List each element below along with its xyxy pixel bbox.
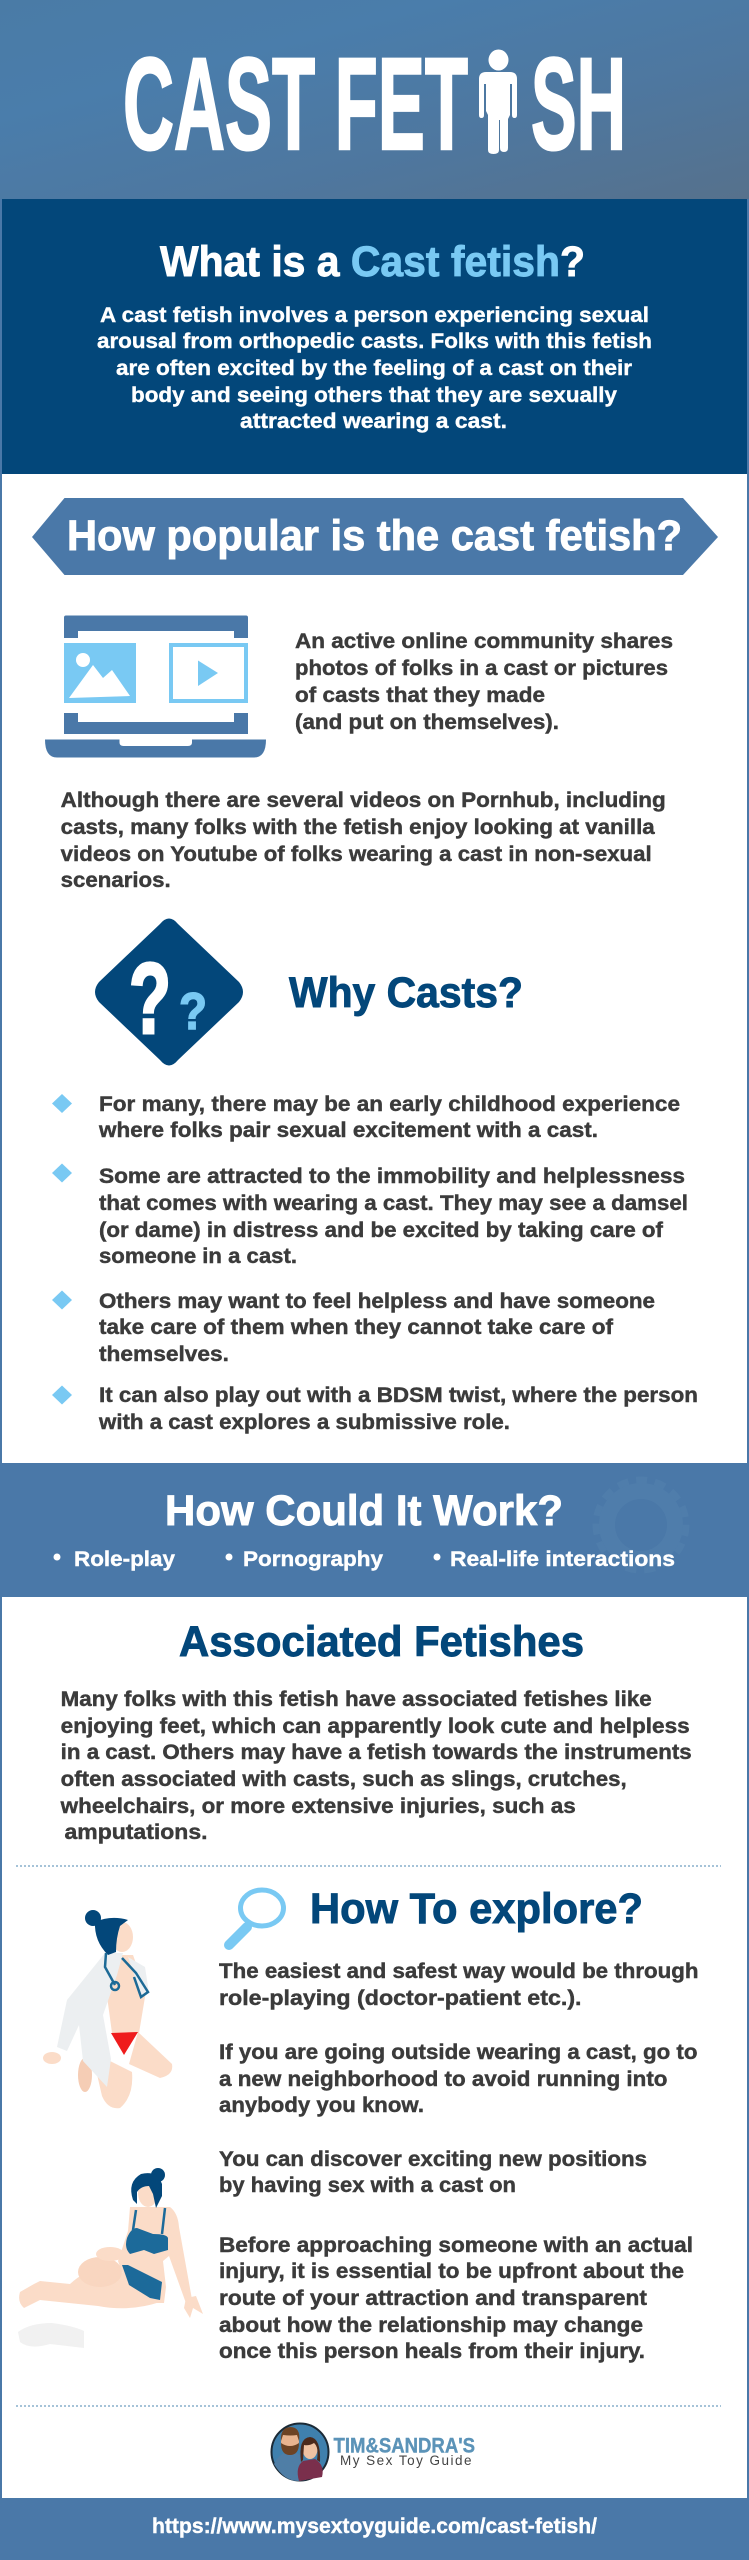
text: online community: photos of folks in a cast or pictures [295, 656, 668, 680]
text: online community: An active online community shares [295, 629, 673, 653]
text: how to explore: anybody you know. [219, 2093, 424, 2117]
definition text: body and seeing others that they are sexually [131, 383, 617, 407]
bullet item 3: take care of them when they cannot take care of [99, 1315, 614, 1339]
header panel [0, 0, 749, 199]
text: videos: scenarios. [61, 868, 171, 892]
bullet item 2: (or dame) in distress and be excited by taking care of [99, 1218, 664, 1242]
bullet item 1 [52, 1092, 680, 1142]
icon: laptop with image and video [45, 616, 266, 758]
text: how to explore: You can discover exciting new positions [219, 2147, 647, 2171]
banner: how popular [32, 498, 718, 575]
text: how to explore: a new neighborhood to avoid running into [219, 2067, 668, 2091]
panel: how could it work [0, 1463, 749, 1597]
bullet item 1: where folks pair sexual excitement with a cast. [98, 1118, 598, 1142]
text: associated fetishes [60, 1687, 692, 1844]
bullet item 2: someone in a cast. [99, 1244, 297, 1268]
text: how to explore: If you are going outside wearing a cast, go to [219, 2040, 698, 2064]
text: how to explore: injury, it is essential to be upfront about the [219, 2259, 684, 2283]
footer url: https://www.mysextoyguide.com/cast-fetish/ [152, 2514, 597, 2538]
bullet item 2: Some are attracted to the immobility and helplessness [99, 1164, 685, 1188]
footer band [0, 2498, 749, 2560]
bullet item 4 [52, 1383, 698, 1434]
bullet item 4: with a cast explores a submissive role. [98, 1410, 510, 1434]
text: associated fetishes: amputations. [64, 1820, 208, 1844]
icon: question diamond: ? [129, 943, 171, 1055]
icon: person with leg cast [479, 50, 517, 154]
heading: What is a Cast fetish? [160, 238, 585, 286]
text: how to explore [219, 1959, 698, 2363]
text: how to explore: route of your attraction and transparent [219, 2286, 647, 2310]
bullet item 3: themselves. [99, 1342, 229, 1366]
list: why casts [52, 1092, 698, 1434]
heading: associated fetishes: Associated Fetishes [179, 1618, 584, 1666]
text: online community: of casts that they made [295, 683, 545, 707]
bullet item 1: For many, there may be an early childhood experience [99, 1092, 680, 1116]
bullet item 3 [52, 1289, 655, 1366]
logo tagline: My Sex Toy Guide [340, 2453, 472, 2468]
text: associated fetishes: often associated with casts, such as slings, crutches, [61, 1767, 627, 1791]
icon: question diamond: ? [179, 983, 207, 1041]
heading: why casts: Why Casts? [289, 969, 523, 1017]
text: online community: (and put on themselves). [295, 710, 559, 734]
text: how to explore: by having sex with a cast on [219, 2173, 516, 2197]
illustration: figure in doctor coat [43, 1910, 172, 2108]
definition text: attracted wearing a cast. [240, 409, 507, 433]
icon: gear [596, 1480, 686, 1570]
ways list: Pornography [243, 1547, 383, 1571]
text: how to explore: once this person heals from their injury. [219, 2339, 645, 2363]
text: how to explore: role-playing (doctor-patient etc.). [219, 1986, 582, 2010]
text: associated fetishes: enjoying feet, which can apparently look cute and helpless [61, 1714, 690, 1738]
title: SH [531, 30, 626, 177]
text: online community [295, 629, 673, 734]
text: videos: Although there are several videos on Pornhub, including [61, 788, 666, 812]
text: videos: casts, many folks with the fetish enjoy looking at vanilla [61, 815, 656, 839]
logo badge [272, 2424, 328, 2481]
ways list: Role-play [74, 1547, 175, 1571]
bullet item 2 [52, 1164, 688, 1268]
heading: how to explore: How To explore? [310, 1885, 643, 1933]
definition text: are often excited by the feeling of a cast on their [116, 356, 633, 380]
text: associated fetishes: in a cast. Others may have a fetish towards the instruments [61, 1740, 692, 1764]
banner: how popular: How popular is the cast fetish? [67, 512, 682, 560]
text: videos [61, 788, 666, 892]
text: associated fetishes: Many folks with this fetish have associated fetishes like [61, 1687, 652, 1711]
logo [272, 2424, 475, 2481]
text: how to explore: about how the relationship may change [219, 2313, 643, 2337]
text: how to explore: Before approaching someone with an actual [219, 2233, 693, 2257]
text: how to explore: The easiest and safest way would be through [219, 1959, 698, 1983]
icon: question diamond [95, 918, 243, 1066]
panel: what is a cast fetish [2, 199, 747, 474]
ways list [54, 1547, 675, 1571]
bullet item 4: It can also play out with a BDSM twist, where the person [99, 1383, 698, 1407]
definition text [97, 303, 652, 433]
bullet item 3: Others may want to feel helpless and have someone [99, 1289, 655, 1313]
definition text: arousal from orthopedic casts. Folks with this fetish [97, 329, 652, 353]
logo wordmark: TIM&SANDRA'S [334, 2435, 475, 2458]
heading: How Could It Work? [165, 1487, 563, 1535]
bullet item 2: that comes with wearing a cast. They may see a damsel [99, 1191, 688, 1215]
definition text: A cast fetish involves a person experiencing sexual [100, 303, 649, 327]
ways list: Real-life interactions [450, 1547, 675, 1571]
cast shape [18, 2323, 84, 2348]
illustration: seated figure [19, 2168, 203, 2318]
text: videos: videos on Youtube of folks wearing a cast in non-sexual [61, 842, 652, 866]
title: CAST FET [123, 30, 468, 177]
icon: stethoscope [105, 1953, 148, 1997]
text: associated fetishes: wheelchairs, or more extensive injuries, such as [60, 1794, 576, 1818]
icon: magnifier [229, 1890, 284, 1945]
